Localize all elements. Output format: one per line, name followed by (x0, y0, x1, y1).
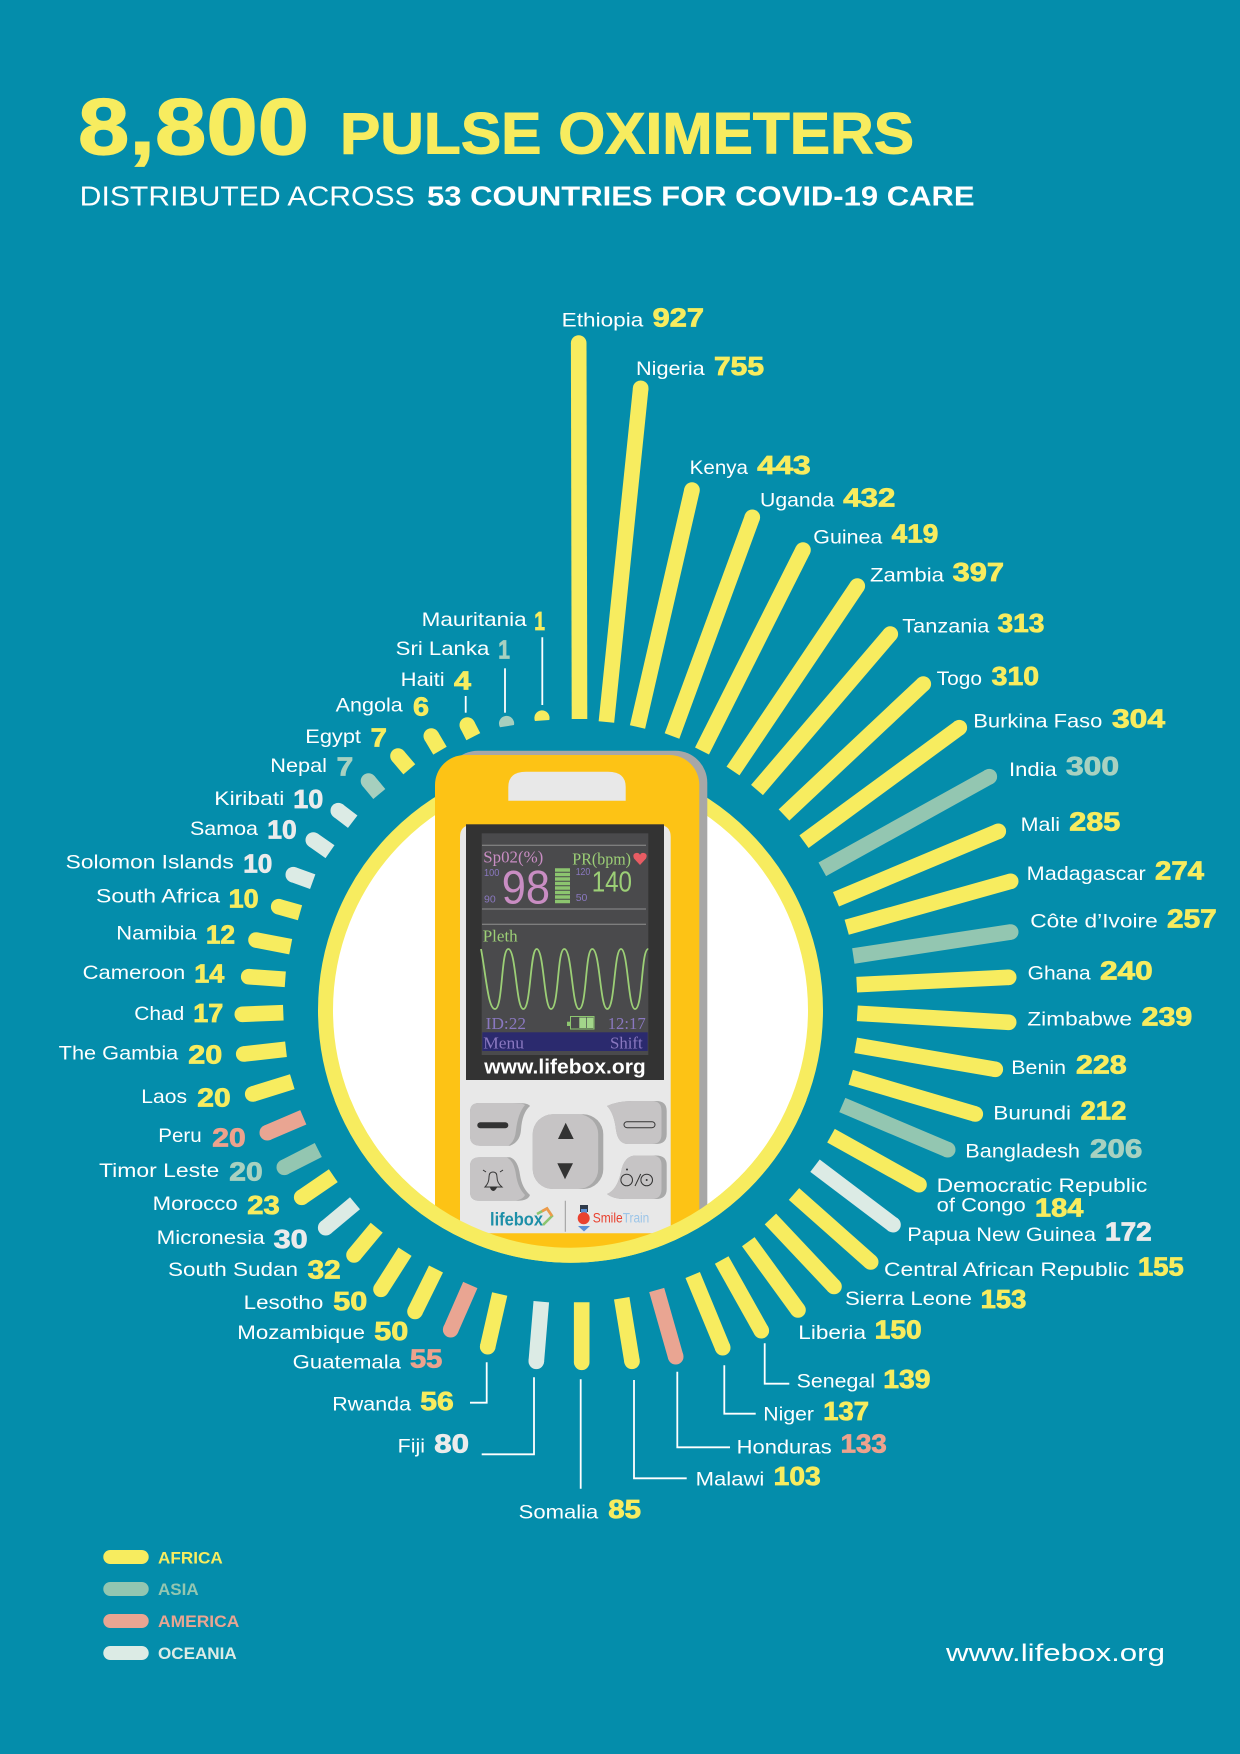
bar: Uganda 432: 432 (843, 483, 895, 513)
bar: Solomon Islands 10: 10 (243, 848, 272, 878)
bar: Sri Lanka 1 (396, 635, 514, 727)
bar: Laos 20: Laos (141, 1086, 187, 1108)
logo: Smile Train (578, 1205, 649, 1232)
bar: Kenya 443: Kenya (690, 457, 748, 479)
bar: Kiribati 10: Kiribati (214, 788, 284, 810)
bar: Mali 285: Mali (1021, 814, 1060, 836)
bar: Liberia 150: Liberia (798, 1322, 866, 1344)
subtitle: DISTRIBUTED ACROSS (80, 181, 415, 212)
bar: Zambia 397: 397 (953, 557, 1004, 587)
bar: Bangladesh 206 (842, 1105, 1142, 1164)
bar: Honduras 133: 133 (841, 1429, 887, 1459)
pulse rate readout: 140 (592, 867, 632, 899)
logo divider (564, 1200, 566, 1232)
bar: Morocco 23: 23 (247, 1190, 280, 1220)
bar: Liberia 150 (748, 1242, 922, 1344)
legend: America: AMERICA (158, 1612, 239, 1631)
bar: Kiribati 10: 10 (293, 784, 323, 814)
bar: Angola 6 (336, 691, 440, 751)
bar: The Gambia 20 (59, 1040, 286, 1070)
bar: Cameroon 14: Cameroon (83, 962, 185, 984)
menu bar: Shift (610, 1033, 643, 1052)
bar: Somalia 85: Somalia (519, 1502, 598, 1524)
pulse rate readout (572, 852, 647, 901)
bar: Malawi 103: 103 (774, 1461, 821, 1491)
bar: Malawi 103: Malawi (696, 1469, 764, 1491)
bar: India 300 (822, 751, 1119, 869)
subtitle (80, 181, 974, 212)
bar: Timor Leste 20 (99, 1150, 318, 1186)
bar: Burkina Faso 304: 304 (1112, 703, 1166, 733)
bar: Nigeria 755: 755 (714, 351, 764, 381)
bar: Burkina Faso 304: Burkina Faso (973, 710, 1102, 732)
bar: Togo 310: Togo (937, 668, 982, 690)
bar: South Sudan 32: South Sudan (168, 1259, 298, 1281)
bar: Côte d'Ivoire 257: Côte d’Ivoire (1030, 911, 1158, 933)
pleth waveform (481, 927, 648, 1009)
bar: Senegal 139: Senegal (797, 1371, 875, 1393)
bar: Papua New Guinea 172 (815, 1166, 1152, 1246)
bar: The Gambia 20: The Gambia (59, 1042, 178, 1064)
bar: Madagascar 274 (847, 856, 1205, 927)
bar: Ethiopia 927: Ethiopia (562, 310, 643, 332)
status row: 12:17 (608, 1014, 646, 1033)
bar: Guatemala 55: Guatemala (293, 1351, 401, 1373)
bar: Chad 17: Chad (134, 1003, 184, 1025)
bar: Zimbabwe 239: 239 (1142, 1002, 1192, 1032)
bar: Fiji 80: Fiji (398, 1436, 425, 1458)
bar: Burundi 212 (851, 1077, 1126, 1126)
bar: Ethiopia 927: 927 (653, 303, 704, 333)
bar: Somalia 85: 85 (608, 1494, 641, 1524)
bar: Papua New Guinea 172: Papua New Guinea (907, 1224, 1096, 1246)
bar: Samoa 10: Samoa (190, 818, 258, 840)
bar: Somalia 85 (519, 1302, 641, 1524)
bar: Timor Leste 20: Timor Leste (99, 1160, 219, 1182)
device face panel (460, 825, 671, 1233)
bar: Central African Republic 155: 155 (1138, 1251, 1184, 1281)
SpO2 readout (484, 850, 570, 904)
screen URL: www.lifebox.org (483, 1056, 646, 1078)
bar: Mali 285: 285 (1069, 807, 1120, 837)
bar: Democratic Republic of Congo 184 (831, 1136, 1148, 1223)
button: top left (470, 1103, 530, 1146)
bar: Nepal 7: 7 (337, 752, 353, 782)
bar: Uganda 432: Uganda (760, 490, 834, 512)
bar: Democratic Republic of Congo 184: Democratic Republic (937, 1175, 1148, 1197)
legend: Oceania: OCEANIA (158, 1644, 237, 1663)
bar: Laos 20 (141, 1082, 292, 1113)
bar: South Sudan 32: 32 (308, 1255, 341, 1285)
bar: Burundi 212: 212 (1081, 1096, 1126, 1126)
logo: Smile Train: Train (623, 1210, 649, 1225)
bar: Rwanda 56 (332, 1294, 500, 1416)
pulse rate readout: 50 (576, 892, 588, 904)
radial bar chart of countries (59, 303, 1217, 1524)
bar: Guatemala 55 (293, 1285, 470, 1373)
bar: Ghana 240: Ghana (1028, 962, 1091, 984)
bar: Micronesia 30 (157, 1203, 355, 1254)
bar: Namibia 12: Namibia (116, 923, 197, 945)
bar: Fiji 80 (398, 1302, 544, 1458)
bar: Guinea 419 (702, 519, 938, 751)
legend (103, 1548, 239, 1663)
bar: Benin 228: Benin (1011, 1057, 1066, 1079)
bar: Angola 6: 6 (413, 691, 429, 721)
bar: Sierra Leone 153: 153 (981, 1284, 1026, 1314)
bar: Guatemala 55: 55 (410, 1343, 442, 1373)
bar: India 300: 300 (1066, 751, 1119, 781)
bar: Benin 228 (856, 1045, 1127, 1079)
bar: Liberia 150: 150 (875, 1314, 922, 1344)
bar: Côte d'Ivoire 257 (853, 904, 1217, 956)
bar: Kenya 443 (638, 450, 811, 727)
pleth waveform: Pleth (483, 927, 518, 946)
bar: Lesotho 50: 50 (333, 1286, 367, 1316)
white disk with yellow ring (326, 765, 816, 1255)
bar: Zambia 397: Zambia (870, 565, 944, 587)
bar: South Africa 10: 10 (229, 883, 259, 913)
bar: Peru 20: Peru (158, 1125, 202, 1147)
bar: Mauritania 1: Mauritania (422, 609, 527, 631)
status row (486, 1016, 646, 1030)
SpO2 readout: 98 (502, 860, 550, 913)
bar: Morocco 23: Morocco (153, 1193, 238, 1215)
title: PULSE OXIMETERS (340, 101, 914, 166)
bar: Papua New Guinea 172: 172 (1105, 1216, 1152, 1246)
bar: Nigeria 755 (606, 351, 764, 722)
logo: Smile Train: Smile (593, 1210, 623, 1225)
bar: Egypt 7: Egypt (305, 726, 362, 748)
website URL: www.lifebox.org (945, 1640, 1165, 1667)
bar: Zimbabwe 239 (857, 1002, 1192, 1032)
bar: Lesotho 50 (244, 1252, 405, 1316)
bar: Peru 20 (158, 1117, 303, 1153)
bar: Côte d'Ivoire 257: 257 (1167, 904, 1217, 934)
status row: ID:22 (486, 1014, 526, 1033)
bar: Sri Lanka 1: 1 (498, 635, 510, 665)
bar: Namibia 12: 12 (206, 919, 235, 949)
bar: Rwanda 56: 56 (420, 1386, 454, 1416)
bar: Burundi 212: Burundi (993, 1103, 1071, 1125)
bar: Central African Republic 155: Central African Republic (884, 1259, 1130, 1281)
button: bottom left with bell icon (470, 1157, 530, 1201)
bar: Nigeria 755: Nigeria (636, 358, 705, 380)
bar: Egypt 7: 7 (371, 723, 387, 753)
device body (435, 755, 700, 1248)
legend: Africa: AFRICA (158, 1548, 223, 1567)
bar: Haiti 4 (401, 665, 475, 737)
bar: Sierra Leone 153 (770, 1219, 1026, 1314)
bar: Central African Republic 155 (794, 1194, 1184, 1281)
bar: Solomon Islands 10: Solomon Islands (66, 852, 234, 874)
bar: Guinea 419: 419 (892, 519, 938, 549)
bar: Angola 6: Angola (336, 695, 403, 717)
bar: Fiji 80: 80 (434, 1428, 469, 1458)
menu bar (482, 1032, 648, 1052)
bar: Nepal 7 (270, 752, 379, 794)
bar: Cameroon 14 (83, 959, 285, 989)
bar: Senegal 139 (722, 1260, 930, 1394)
bar: Chad 17: 17 (193, 998, 223, 1028)
bar: Lesotho 50: Lesotho (244, 1292, 323, 1314)
pulse rate readout: PR(bpm) (572, 849, 631, 868)
screen (481, 833, 648, 1055)
pulse oximeter device (435, 750, 708, 1248)
button: up and down arrows (533, 1114, 603, 1189)
bar: Chad 17 (134, 998, 283, 1028)
bar: Tanzania 313 (757, 608, 1044, 790)
bar: Madagascar 274: 274 (1155, 856, 1205, 886)
bar: Peru 20: 20 (212, 1123, 246, 1153)
SpO2 readout: Sp02(%) (483, 848, 543, 867)
bar: Niger 137 (693, 1275, 869, 1426)
bar: Senegal 139: 139 (883, 1364, 930, 1394)
bar: India 300: India (1009, 759, 1057, 781)
bar: South Africa 10: South Africa (96, 886, 220, 908)
bar: Haiti 4: 4 (454, 665, 472, 695)
bar: Solomon Islands 10 (66, 848, 313, 882)
bar: Namibia 12 (116, 919, 291, 949)
bar: Honduras 133: Honduras (737, 1436, 832, 1458)
bar: Honduras 133 (657, 1290, 887, 1459)
button: top right (607, 1101, 667, 1144)
device shadow edge (461, 750, 708, 1210)
pulse rate readout: 120 (576, 866, 590, 878)
bar: Bangladesh 206: 206 (1090, 1134, 1142, 1164)
bar: Egypt 7 (305, 723, 409, 769)
bar: Zimbabwe 239: Zimbabwe (1027, 1009, 1132, 1031)
bar: Laos 20: 20 (197, 1083, 231, 1113)
ring lower overlap on device (334, 1100, 806, 1263)
menu bar: Menu (483, 1033, 525, 1052)
bar: Rwanda 56: Rwanda (332, 1394, 411, 1416)
bar: Togo 310: 310 (992, 661, 1039, 691)
bar: Togo 310 (784, 661, 1039, 815)
bar: Uganda 432 (672, 483, 895, 736)
logo: lifebox: lifebox (490, 1210, 543, 1230)
bar: Samoa 10: 10 (267, 814, 297, 844)
bar: Mozambique 50: 50 (374, 1316, 408, 1346)
bar: Mauritania 1 (422, 606, 550, 721)
bar: Zambia 397 (733, 557, 1004, 771)
bar: South Sudan 32 (168, 1228, 377, 1285)
SpO2 readout: 90 (484, 893, 496, 905)
bar: Cameroon 14: 14 (194, 959, 225, 989)
bar: Madagascar 274: Madagascar (1027, 863, 1146, 885)
bar: Nepal 7: Nepal (270, 755, 327, 777)
bar: Tanzania 313: 313 (998, 608, 1044, 638)
bar: Samoa 10 (190, 814, 330, 852)
bar: Niger 137: 137 (823, 1396, 869, 1426)
bar: Sri Lanka 1: Sri Lanka (396, 638, 489, 660)
bar: Ghana 240: 240 (1100, 955, 1153, 985)
bar: Mali 285 (836, 807, 1120, 899)
bar: South Africa 10 (96, 883, 300, 914)
bar: Democratic Republic of Congo 184: 184 (1035, 1193, 1084, 1223)
SpO2 readout: 100 (484, 867, 499, 879)
bar: Kiribati 10 (214, 784, 353, 822)
bar: The Gambia 20: 20 (188, 1040, 222, 1070)
bar: Burkina Faso 304 (804, 703, 1166, 842)
bar: Ghana 240 (857, 955, 1153, 985)
bar: Morocco 23 (153, 1176, 333, 1220)
bar: Malawi 103 (622, 1298, 821, 1491)
bar: Mozambique 50 (237, 1269, 436, 1346)
bar: Sierra Leone 153: Sierra Leone (845, 1288, 972, 1310)
legend: Asia: ASIA (158, 1580, 199, 1599)
bar: Kenya 443: 443 (757, 450, 811, 480)
bar: Niger 137: Niger (763, 1404, 815, 1426)
bar: Micronesia 30: 30 (274, 1224, 308, 1254)
bar: Democratic Republic of Congo 184: of Congo (937, 1195, 1026, 1217)
bar: Mozambique 50: Mozambique (237, 1322, 365, 1344)
subtitle: 53 COUNTRIES FOR COVID-19 CARE (427, 181, 974, 212)
bar: Ethiopia 927 (562, 303, 704, 719)
bar: Tanzania 313: Tanzania (902, 615, 989, 637)
bar: Timor Leste 20: 20 (229, 1156, 263, 1186)
bar: Haiti 4: Haiti (401, 669, 445, 691)
title (78, 82, 914, 171)
bar: Micronesia 30: Micronesia (157, 1227, 265, 1249)
screen bezel (466, 824, 664, 1080)
bar: Bangladesh 206: Bangladesh (965, 1141, 1080, 1163)
button: bottom right (607, 1156, 667, 1199)
title: 8,800 (78, 82, 309, 171)
top tab (508, 772, 626, 801)
bar: Guinea 419: Guinea (813, 526, 882, 548)
bar: Mauritania 1: 1 (534, 606, 545, 636)
bar: Benin 228: 228 (1076, 1049, 1127, 1079)
